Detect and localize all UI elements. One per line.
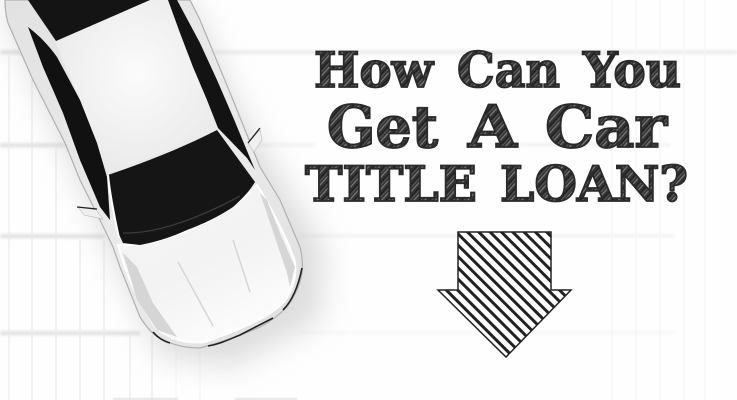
left mirror [77, 207, 103, 219]
title line 2: Get [327, 93, 438, 161]
title line 1: How [314, 41, 435, 99]
car [5, 0, 302, 348]
rear window [28, 0, 150, 41]
right side window [168, 0, 255, 170]
windshield [108, 130, 255, 245]
hood creases [178, 240, 250, 326]
front bumper edge [153, 268, 302, 346]
hood [118, 185, 296, 342]
car shadow [0, 0, 325, 368]
title line 3: TITLE [305, 155, 477, 213]
title line 2: A [467, 93, 518, 161]
title line 1: Can [457, 41, 560, 99]
windshield highlight [123, 196, 240, 233]
faint cropped text at bottom edge [113, 398, 297, 400]
right mirror [248, 128, 262, 152]
title line 3 [305, 155, 688, 213]
left side window [28, 27, 110, 220]
title line 2 [327, 93, 669, 161]
white pillar trim [108, 175, 119, 238]
title line 3: LOAN? [500, 155, 688, 213]
title line 2: Car [545, 93, 669, 161]
title [305, 41, 688, 213]
car body [5, 0, 302, 348]
arrow: hatched down arrow [438, 232, 571, 357]
roof [55, 0, 218, 175]
title line 1: You [582, 41, 681, 99]
title line 1 [314, 41, 681, 99]
hood shading [123, 193, 295, 337]
